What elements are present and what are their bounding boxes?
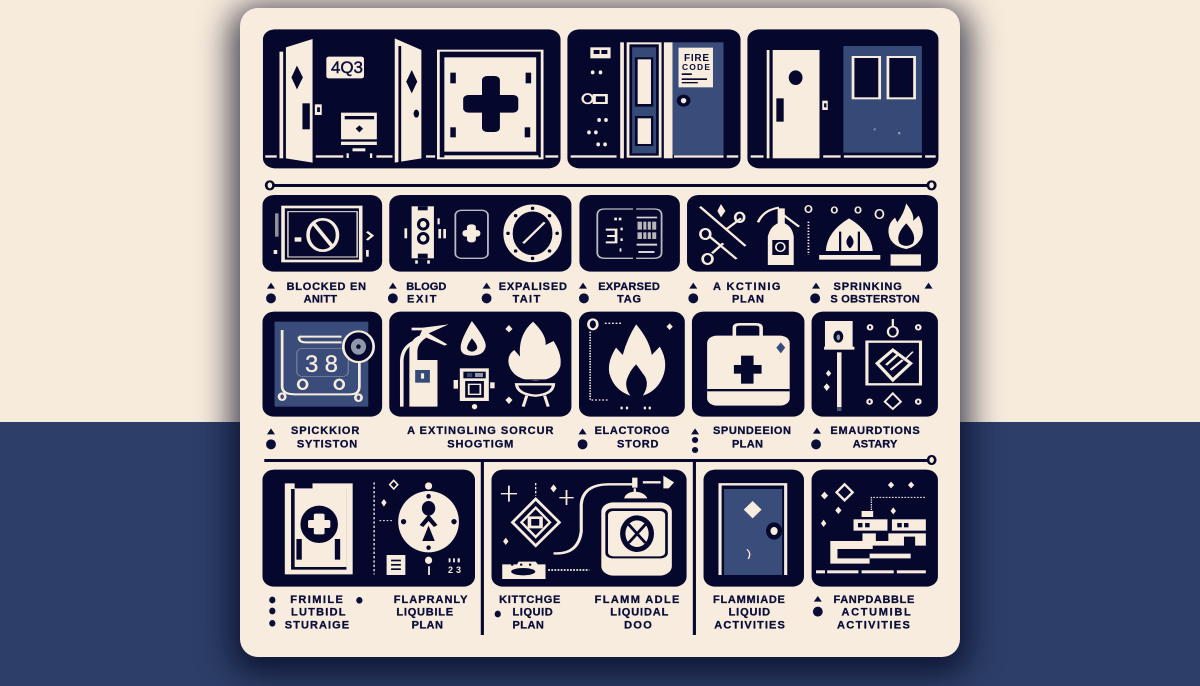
labels: fourth row: FLAMMIADE xyxy=(713,594,785,606)
labels: second row: S OBSTERSTON xyxy=(830,294,920,306)
labels: fourth row: FRIMILE xyxy=(290,594,343,606)
number: 23: 23 xyxy=(448,565,461,575)
labels: fourth row: LIQUID xyxy=(512,606,553,618)
fourth row panels xyxy=(262,470,938,587)
labels: fourth row: DOO xyxy=(624,620,652,632)
card xyxy=(240,8,960,657)
panel: fire code door xyxy=(567,29,741,168)
bullets: fourth row xyxy=(269,596,823,627)
bullets: second row xyxy=(266,283,933,303)
panel: exit hardware and porthole xyxy=(389,195,571,272)
labels: fourth row xyxy=(285,594,914,632)
labels: third row: SHOGTIGM xyxy=(447,438,513,450)
bullets: third row xyxy=(266,428,821,453)
labels: third row xyxy=(291,425,920,450)
labels: fourth row: FANPDABBLE xyxy=(834,594,914,606)
sign: 4Q3: 4Q3 xyxy=(331,58,363,77)
labels: fourth row: FLAMM ADLE xyxy=(595,594,679,606)
labels: third row: SPUNDEEION xyxy=(713,425,791,437)
labels: fourth row: FLAPRANLY xyxy=(394,594,468,606)
second row panels xyxy=(262,195,938,272)
labels: third row: SYTISTON xyxy=(297,438,357,450)
labels: second row: TAG xyxy=(617,294,641,306)
panel: expansion tag xyxy=(579,195,680,272)
labels: second row: EXPALISED xyxy=(499,281,567,293)
panel: blocked exit xyxy=(262,195,382,272)
labels: fourth row: STURAIGE xyxy=(285,620,349,632)
labels: fourth row: LIQUBILE xyxy=(396,606,453,618)
panel: hazard diamond and kitchen unit xyxy=(492,470,687,587)
labels: third row: SPICKKIOR xyxy=(291,425,359,437)
labels: second row: EXPARSED xyxy=(598,281,660,293)
labels: third row: STORD xyxy=(617,438,659,450)
labels: second row: BLOGD xyxy=(406,281,446,293)
panel: extinguishing station xyxy=(812,312,938,417)
labels: fourth row: LIQUIDAL xyxy=(610,606,669,618)
panel: first aid sign and occupant dial xyxy=(262,470,475,587)
labels: third row: A EXTINGLING SORCUR xyxy=(407,425,554,437)
labels: fourth row: LIQUID xyxy=(729,606,770,618)
third row panels xyxy=(262,312,938,417)
labels: third row: EMAURDTIONS xyxy=(830,425,920,437)
labels: second row xyxy=(287,281,920,306)
labels: second row: SPRINKING xyxy=(834,281,902,293)
labels: second row: ANITT xyxy=(304,294,337,306)
panel: door with diamond xyxy=(704,470,804,587)
labels: second row: EXIT xyxy=(407,294,437,306)
labels: fourth row: ACTIVITIES xyxy=(837,620,910,632)
panel: stepped plan xyxy=(812,470,938,587)
labels: second row: PLAN xyxy=(732,294,764,306)
labels: fourth row: ACTUMIBL xyxy=(842,606,911,618)
labels: fourth row: PLAN xyxy=(412,620,443,632)
panel: fire code door: CODE xyxy=(682,62,710,72)
panel: tools, extinguisher, helmet and flame xyxy=(687,195,938,272)
labels: fourth row: KITTCHGE xyxy=(499,594,560,606)
panel: gauge 38 xyxy=(262,312,382,417)
number: 38: 38 xyxy=(305,351,338,378)
labels: second row: A KCTINIG xyxy=(713,281,780,293)
labels: second row: BLOCKED EN xyxy=(287,281,366,293)
panel: first aid case xyxy=(692,312,804,417)
labels: fourth row: PLAN xyxy=(512,620,544,632)
panel: door and window xyxy=(747,29,938,168)
labels: fourth row: LUTBIDL xyxy=(291,606,346,618)
poster: fire code: FIRE xyxy=(684,53,709,64)
labels: third row: ELACTOROG xyxy=(595,425,670,437)
panel: extinguisher, drop, detector and flame xyxy=(389,312,571,417)
labels: third row: ASTARY xyxy=(853,438,898,450)
panel: flame with dotted guide xyxy=(579,312,685,417)
divider line: top xyxy=(266,181,935,189)
panel: exit doors and first aid xyxy=(263,29,561,168)
labels: third row: PLAN xyxy=(732,438,763,450)
divider lines: lower grid xyxy=(264,456,935,635)
labels: fourth row: ACTIVITIES xyxy=(714,620,785,632)
top row panels xyxy=(263,29,938,168)
labels: second row: TAIT xyxy=(512,294,540,306)
